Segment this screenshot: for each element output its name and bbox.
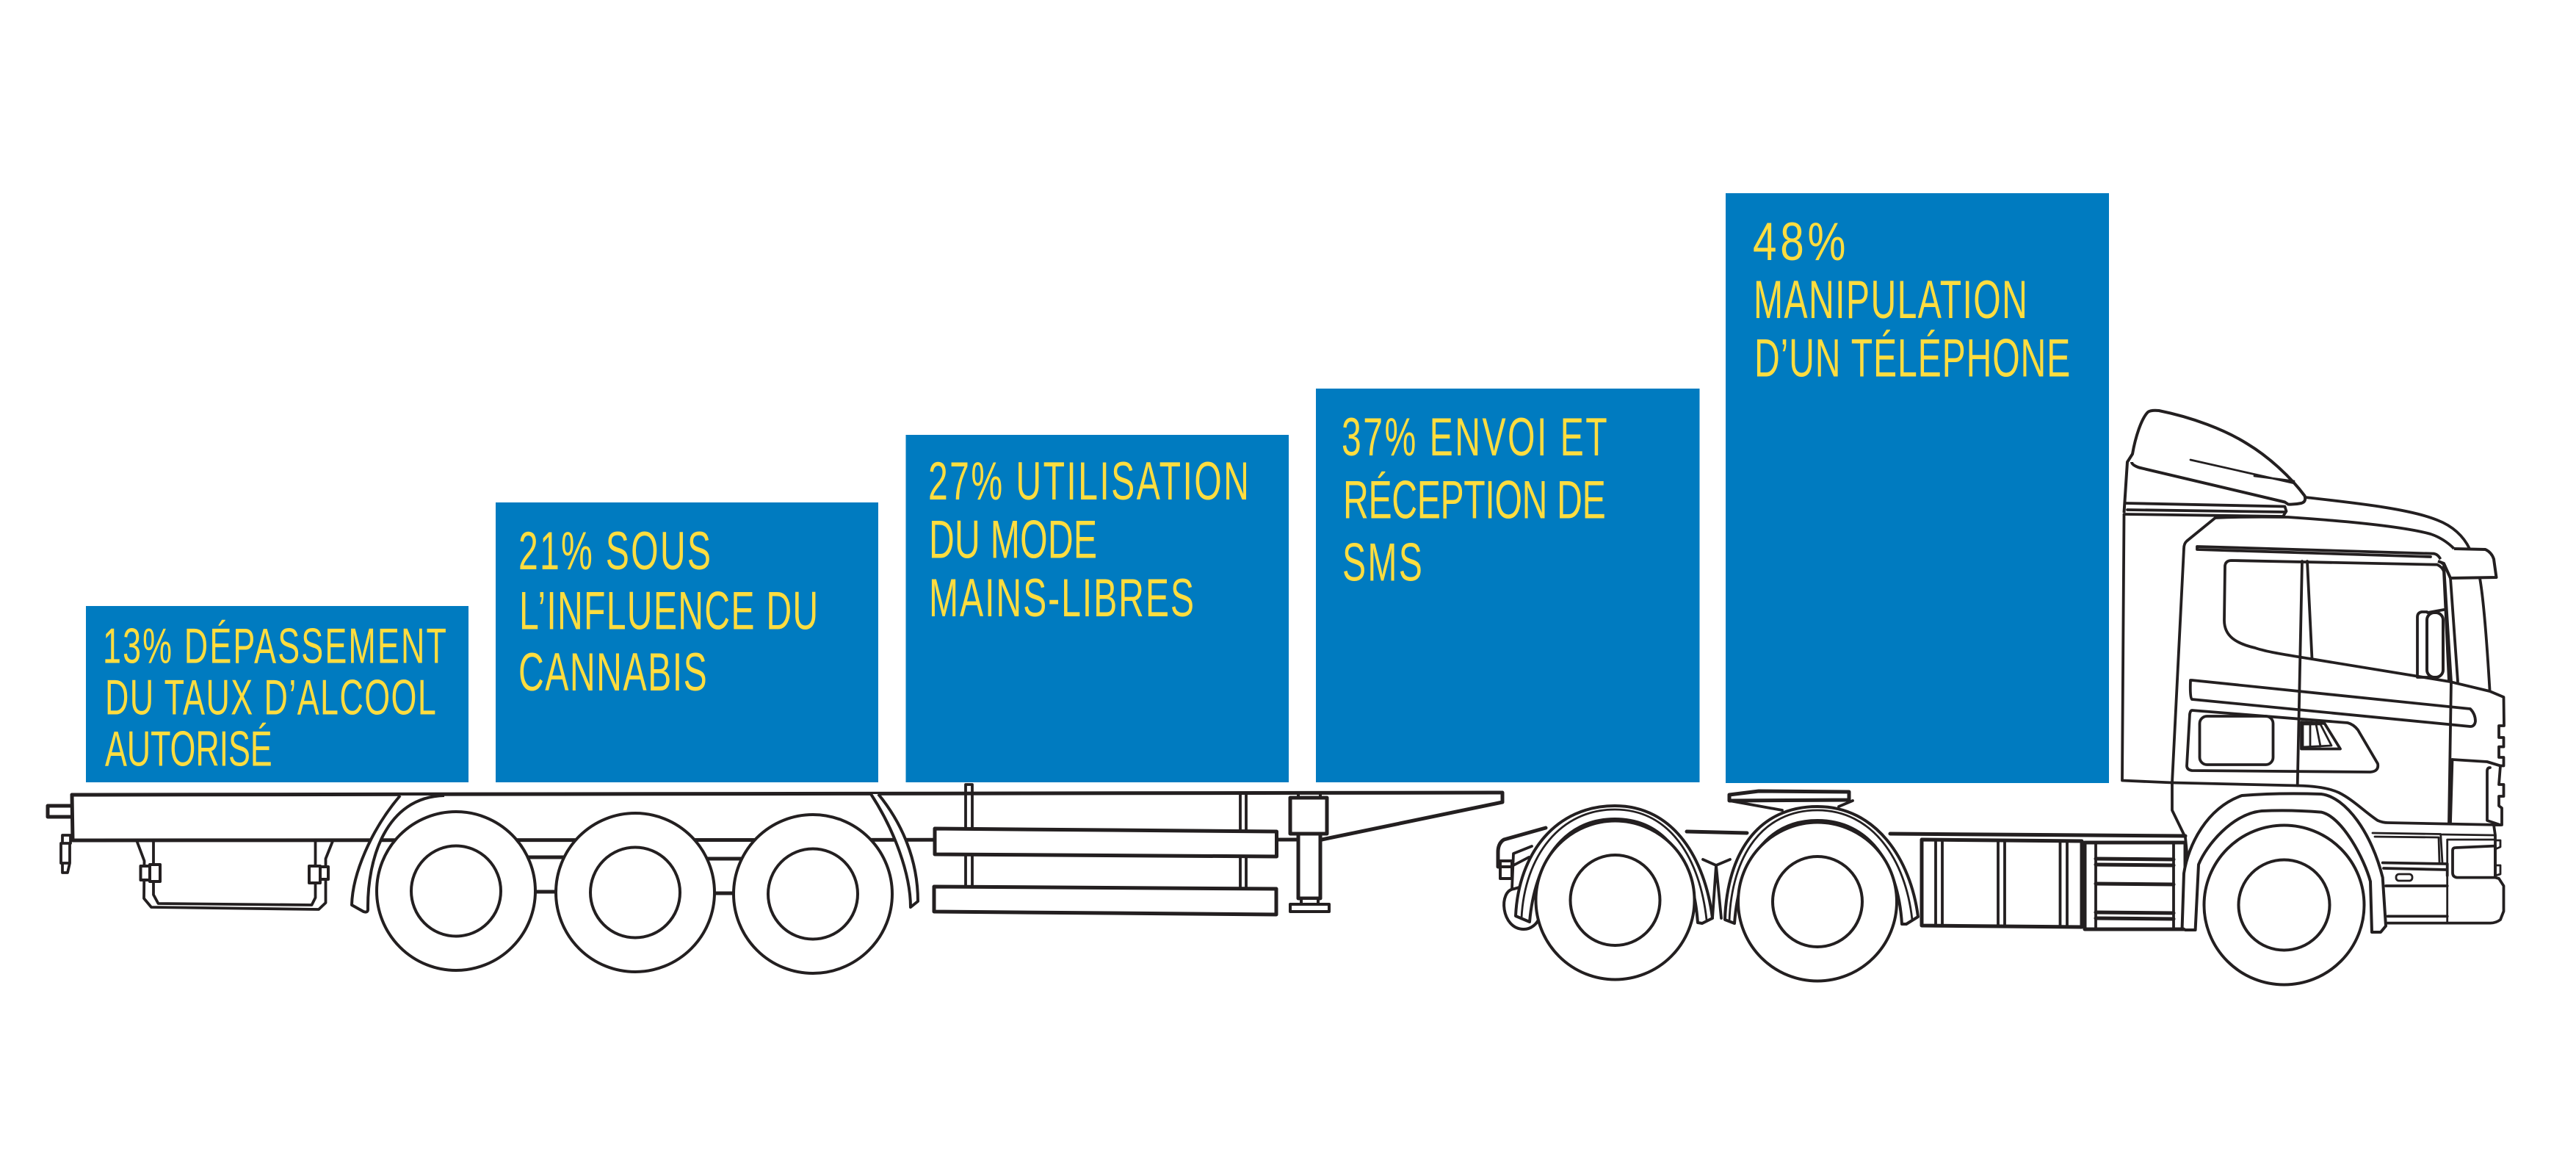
bar: 13% alcohol [86, 606, 468, 782]
centre hanger [1703, 859, 1730, 918]
cab side trim [2190, 680, 2475, 726]
rear axle wheel 1 with fender [1516, 806, 1712, 980]
side mirror [2417, 610, 2444, 677]
trailer wheel 1 [377, 812, 535, 970]
label: 27% UTILISATION [928, 452, 1249, 512]
bar fill [1316, 389, 1699, 782]
label: D’UN TÉLÉPHONE [1754, 329, 2070, 389]
fuel tank [1922, 840, 2082, 927]
label: CANNABIS [518, 643, 707, 703]
bar fill [86, 606, 468, 782]
front step and bumper [2373, 825, 2504, 923]
label: 21% SOUS [518, 522, 711, 582]
label: 37% ENVOI ET [1342, 408, 1607, 468]
fifth wheel [1729, 791, 1853, 810]
front fender [2182, 793, 2386, 932]
landing gear [1290, 794, 1329, 912]
label: RÉCEPTION DE [1343, 471, 1606, 530]
front mudguard [871, 794, 918, 907]
bar: 37% SMS [1316, 389, 1699, 782]
door and pillars [2298, 561, 2489, 823]
battery box [2085, 843, 2185, 929]
trailer chassis [48, 793, 1502, 840]
tractor [1498, 411, 2504, 984]
side guard posts [966, 785, 1246, 889]
rear bumper [1498, 828, 1546, 929]
trailer axles [529, 857, 742, 893]
label [1342, 408, 1607, 593]
side guard rails [934, 829, 1276, 915]
cab body [2172, 497, 2500, 859]
label [928, 452, 1249, 629]
label: AUTORISÉ [105, 722, 272, 777]
trailer wheel 2 [556, 813, 714, 972]
roof deflector [2124, 411, 2305, 516]
label [1753, 212, 2070, 389]
cab side window [2200, 716, 2273, 765]
bar: 21% cannabis [496, 502, 878, 782]
bar fill [906, 435, 1289, 782]
label: L’INFLUENCE DU [519, 582, 818, 641]
spare carrier [137, 840, 333, 909]
chassis rails [1687, 832, 2185, 836]
cab window [2224, 560, 2449, 682]
label: DU MODE [929, 511, 1097, 570]
label: SMS [1342, 533, 1422, 593]
rear axle wheel 2 with fender [1725, 807, 1918, 981]
front wheel [2204, 826, 2365, 984]
hood and grille [2449, 682, 2504, 825]
trailer [48, 785, 1502, 973]
label: 48% [1753, 212, 1845, 273]
lower cab panel [2187, 710, 2378, 772]
bar: 48% phone [1726, 193, 2109, 783]
label [518, 522, 818, 703]
label: MAINS-LIBRES [929, 569, 1194, 629]
trailer wheel 3 [734, 815, 892, 973]
label: DU TAUX D’ALCOOL [105, 671, 436, 726]
bar fill [1726, 193, 2109, 783]
label: MANIPULATION [1754, 270, 2027, 331]
door handle [2301, 722, 2340, 749]
rear hook [61, 835, 70, 873]
sleeper cab back [2122, 515, 2172, 783]
sun visor [2438, 549, 2497, 578]
label: 13% DÉPASSEMENT [103, 619, 446, 674]
label [103, 619, 446, 777]
bar: 27% hands-free [906, 435, 1289, 782]
rear mudguard [352, 796, 444, 912]
bar fill [496, 502, 878, 782]
